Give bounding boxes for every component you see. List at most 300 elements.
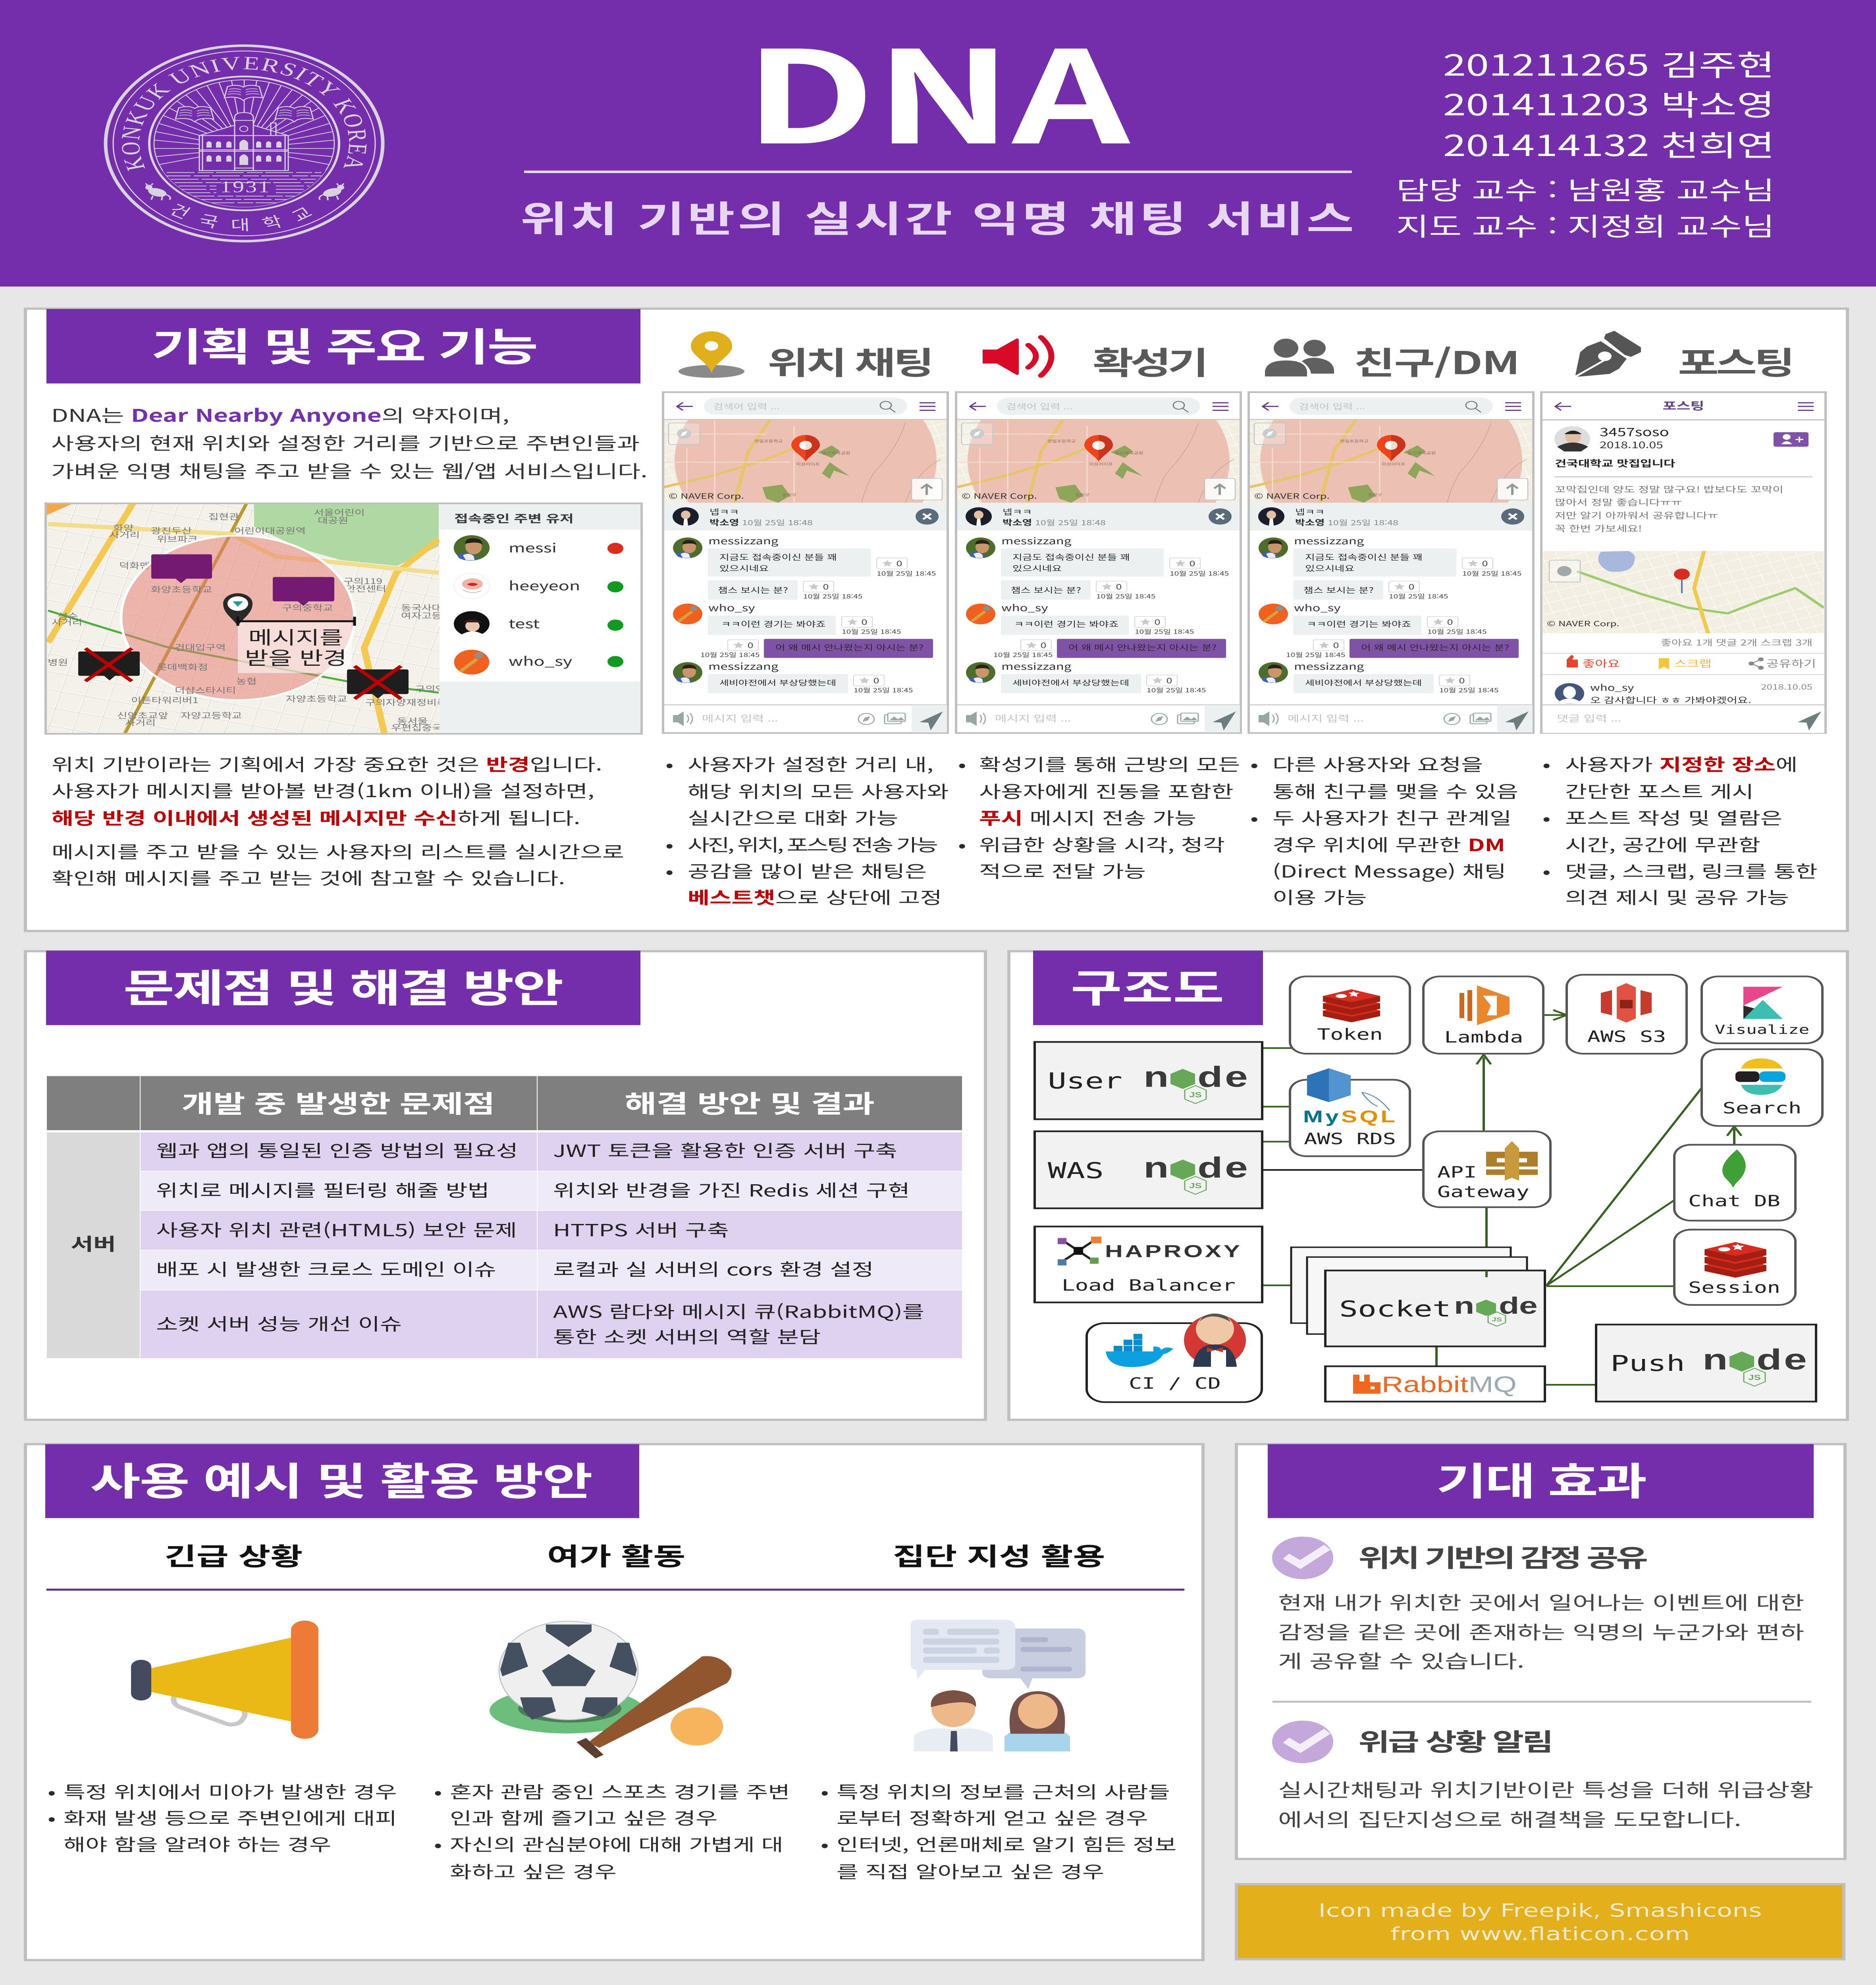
phone: posting screen: 스크랩 [1674, 656, 1712, 670]
text: location chat features [665, 752, 949, 909]
phone: friends and DM screen: 중랑구 [1368, 492, 1382, 497]
text: planning description: 위치 기반이라는 기획에서 가장 중요한 것은 반경입니다. [52, 752, 602, 776]
credit box: from www.flaticon.com [1390, 1924, 1690, 1945]
map: message radius: 광진두산 [151, 524, 192, 536]
credit box: Icon made by Freepik, Smashicons [1318, 1900, 1762, 1921]
team members: 201411203 박소영 [1443, 82, 1775, 124]
box: AWS S3: AWS S3 [1587, 1028, 1666, 1046]
phone: location chat screen: 지금도 접속중이신 분들 꽤 [719, 551, 837, 562]
text: posting features: 사용자가 지정한 장소에 [1565, 752, 1797, 776]
phone: friends and DM screen: 미성리이프 [1382, 462, 1406, 467]
box: API gateway: Gateway [1437, 1183, 1529, 1201]
phone: location chat screen: 동산체육공원 [822, 451, 850, 456]
phone: friends and DM screen: 동산체육공원 [1407, 451, 1436, 456]
phone: megaphone screen: 10월 25일 18:45 [1170, 569, 1229, 578]
heading: expected effects: 기대 효과 [1436, 1451, 1647, 1507]
phone: megaphone screen: 넵ㅋㅋ [1003, 506, 1032, 517]
map: message radius: 농협 [236, 675, 257, 686]
text: friends and DM features: 통해 친구를 맺을 수 있음 [1273, 778, 1518, 803]
text: location chat features: • [665, 832, 673, 856]
text: megaphone features: • [958, 832, 966, 856]
phone: posting screen: © NAVER Corp. [1547, 618, 1620, 628]
text: friends and DM features [1250, 752, 1518, 909]
heading: planning and features [46, 309, 640, 384]
feature heading: megaphone: 확성기 [1093, 338, 1209, 383]
phone: location chat screen: 넵ㅋㅋ [710, 506, 739, 517]
box: search: Search [1723, 1099, 1801, 1117]
table: problems and solutions [47, 1076, 962, 1358]
phone: location chat screen: 면일초등학교 [754, 439, 783, 444]
box: WAS server: e [1225, 1152, 1248, 1184]
text: location chat features: 베스트챗으로 상단에 고정 [688, 885, 942, 909]
map: message radius: 사거리 [109, 529, 140, 540]
table: problems and solutions: HTTPS 서버 구축 [553, 1217, 729, 1241]
box: chat DB: Chat DB [1688, 1193, 1780, 1210]
text: location chat features: 공감을 많이 받은 채팅은 [688, 858, 927, 883]
map: message radius: 사거리 [52, 616, 82, 627]
map: message radius: 롯데백화점 [157, 661, 208, 672]
map: message radius: 더샵스타시티 [175, 684, 236, 696]
box: WAS server: JS [1189, 1181, 1202, 1190]
phone: megaphone screen: who_sy [1001, 601, 1048, 614]
phone: friends and DM screen: 메시지 입력 ... [1288, 711, 1364, 725]
stacked socket servers: JS [1492, 1316, 1502, 1323]
panel: problems and solutions [25, 951, 985, 1420]
feature heading: location chat: 위치 채팅 [767, 338, 934, 383]
text: collective intelligence cases: 를 직접 알아보고 싶은 경우 [837, 1859, 1104, 1883]
text: collective intelligence cases: • [821, 1831, 829, 1856]
box: AWS RDS: MySQL [1303, 1108, 1395, 1126]
text: megaphone features: 확성기를 통해 근방의 모든 [979, 752, 1240, 776]
table: problems and solutions: AWS 람다와 메시지 큐(RabbitMQ)를 [553, 1299, 924, 1323]
text: leisure cases: • [434, 1779, 442, 1803]
radius bar and label: 메시지를 [248, 624, 343, 650]
text: collective intelligence cases: 인터넷, 언론매체로 알기 힘든 정보 [837, 1831, 1176, 1856]
table: problems and solutions: 위치로 메시지를 필터링 해줄 방법 [156, 1177, 490, 1201]
user row: heeyeon: heeyeon [509, 576, 580, 594]
phone: friends and DM screen: 10월 25일 18:45 [1427, 627, 1487, 636]
table: problems and solutions: 서버 [71, 1231, 116, 1255]
text: planning description [52, 752, 624, 889]
box: lambda: Lambda [1444, 1029, 1523, 1046]
text: collective intelligence cases: 로부터 정확하게 얻고 싶은 경우 [837, 1805, 1148, 1829]
table: problems and solutions: 위치와 반경을 가진 Redis 세션 구현 [553, 1177, 910, 1201]
phone: friends and DM screen: 0 [1482, 558, 1488, 569]
feature heading: posting [1575, 331, 1795, 383]
stacked socket servers: Socket [1339, 1296, 1451, 1322]
phone: posting screen: 2018.10.05 [1761, 682, 1812, 692]
phone: posting screen [1541, 392, 1826, 733]
box: user server: d [1197, 1061, 1223, 1093]
phone: location chat screen: 10월 25일 18:45 [842, 627, 901, 636]
intro text: 사용자의 현재 위치와 설정한 거리를 기반으로 주변인들과 [51, 429, 640, 455]
phone: megaphone screen: 10월 25일 18:45 [1096, 592, 1155, 601]
phone: location chat screen: 박소영 [710, 516, 739, 528]
phone: posting screen: 꼭 한번 가보세요! [1555, 522, 1642, 534]
phone: friends and DM screen: ㅋㅋ이런 경기는 봐야죠 [1307, 618, 1411, 629]
box: user server: User [1048, 1068, 1122, 1094]
effect: shared emotion [1272, 1536, 1804, 1673]
box: session: Session [1688, 1279, 1780, 1297]
box: API gateway: API [1437, 1164, 1477, 1181]
connector lines [1262, 1010, 1741, 1385]
box: visualize [1702, 976, 1822, 1043]
phone: location chat screen: 메시지 입력 ... [702, 711, 778, 725]
phone: megaphone screen: messizzang [1001, 659, 1072, 673]
icon: megaphone [131, 1621, 318, 1739]
phone: megaphone screen: 메시지 입력 ... [995, 711, 1071, 725]
radius bar and label: 받을 반경 [245, 644, 347, 670]
table: problems and solutions: 통한 소켓 서버의 역할 분담 [553, 1324, 821, 1348]
phone: friends and DM screen: 있으시네요 [1305, 563, 1354, 573]
heading: problems and solutions: 문제점 및 해결 방안 [123, 956, 563, 1014]
text: location chat features: 실시간으로 대화 가능 [688, 805, 898, 829]
map: message radius: 자양초등학교 [286, 692, 347, 704]
effect: emergency alert [1272, 1721, 1814, 1832]
phone: megaphone screen: 10월 25일 18:45 [993, 651, 1053, 659]
text: friends and DM features: • [1250, 805, 1258, 829]
phone: megaphone screen: 중랑구 [1075, 492, 1089, 497]
phone: friends and DM screen: messizzang [1294, 534, 1364, 547]
box: WAS server: d [1197, 1152, 1223, 1184]
box: push server: n [1702, 1343, 1728, 1376]
phone: location chat screen: 어 왜 메시 안나왔는지 아시는 분? [775, 642, 924, 653]
feature heading: friends and DM [1265, 338, 1520, 383]
map: message radius: 성수 [58, 610, 78, 621]
box: chat DB [1674, 1145, 1795, 1221]
stacked socket servers: e [1519, 1293, 1538, 1319]
marker: visible message [273, 577, 334, 606]
logo: university seal: 건국대학교 [165, 195, 330, 235]
text: location chat features: • [665, 858, 673, 883]
text: friends and DM features: 다른 사용자와 요청을 [1273, 752, 1483, 776]
box: session [1674, 1230, 1795, 1305]
phone: megaphone screen: 챔스 보시는 분? [1011, 584, 1081, 595]
map: message radius: 자양고등학교 [181, 709, 242, 721]
box: push server: d [1756, 1343, 1782, 1376]
user row: test: test [509, 614, 540, 632]
phone: friends and DM screen: © NAVER Corp. [1254, 490, 1330, 501]
feature heading: megaphone [983, 337, 1209, 383]
map: message radius: 우편집중국 [391, 721, 442, 733]
phone: megaphone screen: messizzang [1001, 534, 1072, 547]
map: message radius: 구의자양재정비촉 [365, 696, 447, 707]
text: location chat features: • [665, 752, 673, 776]
phone: friends and DM screen: 어 왜 메시 안나왔는지 아시는 분? [1361, 642, 1509, 653]
phone: megaphone screen: 0 [1166, 675, 1172, 686]
map: message radius: 구의119 [343, 575, 382, 586]
phone: location chat screen: 10월 25일 18:48 [742, 517, 813, 528]
text: planning description: 사용자가 메시지를 받아볼 반경(1km 이내)을 설정하면, [52, 778, 594, 802]
text: location chat features: 해당 위치의 모든 사용자와 [688, 778, 949, 803]
phone: megaphone screen: 세비야전에서 부상당했는데 [1012, 677, 1129, 688]
table: problems and solutions: 로컬과 실 서버의 cors 환경 설정 [553, 1256, 874, 1280]
icon: chat and people [911, 1620, 1085, 1752]
effect: emergency alert: 실시간채팅과 위치기반이란 특성을 더해 위급상황 [1278, 1776, 1814, 1802]
text: leisure cases: 화하고 싶은 경우 [450, 1859, 617, 1883]
phone: friends and DM screen: messizzang [1294, 659, 1364, 673]
logo: university seal: 1931 [220, 177, 271, 196]
phone: location chat screen: 0 [873, 675, 879, 686]
marker: blocked message [347, 666, 409, 699]
text: posting features: • [1542, 805, 1550, 829]
effect: emergency alert: 에서의 집단지성으로 해결책을 도모합니다. [1278, 1806, 1741, 1832]
phone: location chat screen: 검색어 입력 ... [713, 401, 780, 412]
phone: friends and DM screen: 10월 25일 18:48 [1328, 517, 1398, 528]
box: AWS S3 [1567, 975, 1687, 1054]
phone: megaphone screen: 10월 25일 18:45 [1147, 686, 1206, 694]
intro text: DNA는 Dear Nearby Anyone의 약자이며, [51, 401, 509, 427]
phone: posting screen: 2018.10.05 [1600, 438, 1663, 451]
phone: megaphone screen: 0 [1190, 558, 1195, 569]
phone: megaphone screen: 10월 25일 18:48 [1035, 517, 1106, 528]
box: WAS server [1035, 1131, 1262, 1208]
text: friends and DM features: 이용 가능 [1273, 885, 1367, 909]
phone: location chat screen: ㅋㅋ이런 경기는 봐야죠 [721, 618, 825, 629]
box: lambda [1423, 976, 1543, 1054]
effect: shared emotion: 게 공유할 수 있습니다. [1278, 1647, 1524, 1673]
map: message radius: 사거리 [125, 716, 156, 728]
phone: megaphone screen [956, 368, 1241, 733]
phone: friends and DM screen: 10월 25일 18:45 [1389, 592, 1448, 601]
phone: posting screen: 포스팅 [1663, 398, 1704, 413]
phone: megaphone screen: 박소영 [1003, 516, 1032, 528]
phone: location chat screen: 챔스 보시는 분? [718, 584, 788, 595]
phone: location chat screen: 있으시네요 [719, 563, 769, 573]
text: friends and DM features: • [1250, 752, 1258, 776]
stacked socket servers [1291, 1247, 1545, 1346]
phone: megaphone screen: 0 [1041, 640, 1046, 650]
phone: posting screen: 많아서 정말 좋습니다ㅠㅠ [1555, 496, 1682, 508]
stacked socket servers: d [1499, 1293, 1519, 1319]
text: posting features: 의견 제시 및 공유 가능 [1565, 885, 1789, 909]
text: leisure cases: 자신의 관심분야에 대해 가볍게 대 [450, 1831, 783, 1856]
text: friends and DM features: 경우 위치에 무관한 DM [1273, 832, 1505, 856]
phone: megaphone screen: © NAVER Corp. [962, 490, 1037, 501]
effect: emergency alert: 위급 상황 알림 [1358, 1723, 1554, 1758]
title rule and subtitle: 위치 기반의 실시간 익명 채팅 서비스 [520, 190, 1354, 243]
phone: posting screen: 저만 알기 아까워서 공유합니다ㅠ [1555, 509, 1718, 521]
box: user server: n [1143, 1061, 1169, 1093]
table: problems and solutions: 배포 시 발생한 크로스 도메인 이슈 [156, 1256, 496, 1280]
phone: megaphone screen: 미성리이프 [1089, 462, 1113, 467]
marker: blocked message [78, 648, 140, 681]
box: user server: JS [1189, 1091, 1202, 1099]
phone: location chat screen: © NAVER Corp. [669, 490, 744, 501]
phone: posting screen: 댓글 입력 ... [1557, 711, 1621, 725]
phone: megaphone screen: 있으시네요 [1012, 563, 1062, 573]
phone: location chat screen: 10월 25일 18:45 [700, 651, 760, 659]
title: DNA: DNA [744, 0, 1132, 180]
professors [1396, 171, 1775, 243]
text: megaphone features: • [958, 752, 966, 776]
stacked socket servers: n [1454, 1293, 1474, 1319]
phone: megaphone screen: 10월 25일 18:45 [1135, 627, 1194, 636]
box: RabbitMQ [1325, 1366, 1545, 1401]
phone: location chat screen: who_sy [708, 601, 755, 614]
phone: friends and DM screen: 박소영 [1295, 516, 1325, 528]
phone: megaphone screen: 검색어 입력 ... [1006, 401, 1073, 412]
box: AWS RDS [1290, 1068, 1410, 1156]
phone: friends and DM screen: 검색어 입력 ... [1299, 401, 1365, 412]
phone: friends and DM screen: 세비야전에서 부상당했는데 [1305, 677, 1422, 688]
phone: location chat screen: 10월 25일 18:45 [877, 569, 936, 578]
panel: architecture diagram [1009, 951, 1847, 1420]
map: message radius: 동국사대부 [401, 601, 452, 613]
intro text: 가벼운 익명 채팅을 주고 받을 수 있는 웹/앱 서비스입니다. [51, 457, 648, 483]
phone: friends and DM screen: 지금도 접속중이신 분들 꽤 [1305, 551, 1423, 562]
map: message radius: 화양초등학교 [151, 583, 212, 595]
effect: shared emotion: 현재 내가 위치한 곳에서 일어나는 이벤트에 대한 [1278, 1588, 1804, 1615]
phone: location chat screen: 미성리이프 [796, 462, 820, 467]
box: visualize: Visualize [1715, 1023, 1809, 1037]
panel: expected effects [1236, 1444, 1845, 1859]
table: problems and solutions: 해결 방안 및 결과 [625, 1084, 875, 1120]
box: token [1290, 976, 1410, 1054]
phone: megaphone screen: 0 [1155, 616, 1160, 627]
nearby user list [440, 503, 642, 734]
map: message radius: 여자고등학 [401, 609, 452, 621]
map: message radius: 구의역 [415, 683, 445, 694]
phone: friends and DM screen: 10월 25일 18:45 [1462, 569, 1521, 578]
panel: usage examples [25, 1444, 1203, 1960]
text: emergency cases: 화재 발생 등으로 주변인에게 대피 [64, 1805, 397, 1829]
box: push server: Push [1610, 1350, 1685, 1376]
phone: posting screen: 오 감사합니다 ㅎㅎ 가봐야겠어요. [1590, 694, 1751, 705]
text: collective intelligence cases [821, 1779, 1176, 1883]
phone: location chat screen: 10월 25일 18:45 [803, 592, 862, 601]
map: message radius: 건대입구역 [175, 641, 226, 653]
phone: friends and DM screen: 넵ㅋㅋ [1295, 506, 1325, 517]
panel: planning and main features [25, 308, 1847, 931]
user row: who_sy: who_sy [509, 651, 572, 670]
text: emergency cases [48, 1779, 397, 1856]
box: push server: JS [1748, 1374, 1761, 1382]
text: leisure cases: • [434, 1831, 442, 1856]
map: message radius: 구의중학교 [282, 601, 333, 613]
phone: megaphone screen: 지금도 접속중이신 분들 꽤 [1012, 551, 1130, 562]
phone: location chat screen: 0 [862, 616, 867, 627]
table: problems and solutions: 개발 중 발생한 문제점 [181, 1084, 495, 1120]
user row: messi: messi [509, 538, 557, 556]
phone: posting screen: who_sy [1590, 681, 1634, 693]
phone: posting screen: 건국대학교 맛집입니다 [1555, 456, 1675, 469]
column heading: leisure: 여가 활동 [547, 1537, 685, 1572]
column heading: collective intelligence: 집단 지성 활용 [893, 1537, 1105, 1572]
text: emergency cases: • [48, 1805, 56, 1829]
text: planning description: 해당 반경 이내에서 생성된 메시지만 수신하게 됩니다. [52, 805, 580, 829]
box: CI and CD [1087, 1313, 1262, 1402]
professors: 지도 교수 : 지정희 교수님 [1396, 207, 1775, 243]
box: user server: e [1225, 1061, 1248, 1093]
heading: expected effects [1268, 1444, 1814, 1518]
text: posting features: 시간, 공간에 무관함 [1565, 832, 1760, 856]
box: user server [1035, 1042, 1262, 1119]
text: location chat features: 사진, 위치, 포스팅 전송 가능 [688, 832, 938, 856]
text: planning description: 메시지를 주고 받을 수 있는 사용자의 리스트를 실시간으로 [52, 839, 624, 863]
phone: location chat screen: 10월 25일 18:45 [854, 686, 913, 694]
effect: shared emotion: 위치 기반의 감정 공유 [1358, 1538, 1648, 1574]
phone: friends and DM screen: 면일초등학교 [1340, 439, 1369, 444]
credit box [1236, 1884, 1844, 1959]
text: megaphone features: 적으로 전달 가능 [979, 858, 1146, 883]
user row: heeyeon [454, 573, 623, 599]
table: problems and solutions: 사용자 위치 관련(HTML5) 보안 문제 [156, 1217, 517, 1241]
box: load balancer: Load Balancer [1062, 1276, 1236, 1295]
text: posting features: 간단한 포스트 게시 [1565, 778, 1754, 803]
heading: problems and solutions [46, 951, 640, 1025]
text: posting features: • [1542, 752, 1550, 776]
phone: location chat screen: 세비야전에서 부상당했는데 [719, 677, 836, 688]
box: load balancer [1035, 1226, 1262, 1303]
text: posting features: 포스트 작성 및 열람은 [1565, 805, 1782, 829]
user row: test [454, 611, 623, 636]
phone: location chat screen: 중랑구 [782, 492, 796, 497]
box: API gateway [1423, 1131, 1550, 1207]
phone: posting screen: 좋아요 [1583, 656, 1620, 670]
map: message radius: 신양초교앞 [117, 709, 168, 721]
header banner [0, 0, 1876, 287]
phone: friends and DM screen: who_sy [1294, 601, 1341, 614]
phone: location chat screen: 0 [823, 581, 829, 592]
text: posting features: • [1542, 858, 1550, 883]
box: CI and CD: CI / CD [1129, 1375, 1221, 1393]
box: WAS server: WAS [1048, 1158, 1104, 1183]
text: megaphone features [958, 752, 1240, 883]
phone: friends and DM screen: 10월 25일 18:45 [1439, 686, 1498, 694]
box: AWS RDS: AWS RDS [1304, 1130, 1396, 1148]
map: message radius: 위브파크 [157, 533, 198, 544]
text: leisure cases: 인과 함께 즐기고 싶은 경우 [450, 1805, 717, 1829]
icon: soccer ball and bat [490, 1621, 731, 1758]
feature heading: friends and DM: 친구/DM [1354, 338, 1520, 383]
table: problems and solutions: JWT 토큰을 활용한 인증 서버 구축 [553, 1137, 897, 1162]
map: message radius: 집현관 [208, 511, 239, 522]
table: problems and solutions: 웹과 앱의 통일된 인증 방법의 필요성 [156, 1137, 518, 1162]
phone: friends and DM screen: 0 [1409, 581, 1414, 592]
phone: location chat screen [663, 368, 948, 733]
map: message radius: 이튼타워리버1 [131, 694, 199, 705]
map: message radius: 서울어린이 [314, 506, 365, 518]
phone: megaphone screen: ㅋㅋ이런 경기는 봐야죠 [1014, 618, 1118, 629]
heading: planning and features: 기획 및 주요 기능 [151, 315, 538, 372]
map: message radius: 어린이대공원역 [234, 524, 306, 536]
team members: 201414132 천희연 [1443, 122, 1775, 164]
text: posting features [1542, 752, 1818, 909]
marker: visible message [151, 554, 212, 583]
phone: megaphone screen: 면일초등학교 [1047, 439, 1076, 444]
box: push server [1596, 1324, 1816, 1401]
phone: friends and DM screen: 0 [1333, 640, 1339, 650]
box: token: Token [1317, 1026, 1383, 1044]
phone: posting screen: 좋아요 1개 댓글 2개 스크랩 3개 [1661, 636, 1812, 648]
phone: location chat screen: 0 [897, 558, 902, 569]
phone: megaphone screen: 동산체육공원 [1115, 451, 1143, 456]
text: emergency cases: 특정 위치에서 미아가 발생한 경우 [64, 1779, 397, 1803]
map: message radius: 동서울 [397, 715, 428, 726]
heading: usage examples [45, 1444, 639, 1518]
box: search [1702, 1049, 1822, 1126]
phone: posting screen: 3457soso [1600, 423, 1669, 439]
text: leisure cases [434, 1779, 790, 1883]
phone: friends and DM screen [1249, 368, 1533, 733]
text: friends and DM features: 두 사용자가 친구 관계일 [1273, 805, 1512, 829]
box: WAS server: n [1143, 1152, 1169, 1184]
text: friends and DM features: (Direct Message) 채팅 [1273, 858, 1506, 883]
map: message radius: 덕화맨션 [119, 559, 160, 571]
map: message radius: 병원 [48, 656, 68, 667]
effect: shared emotion: 감정을 같은 곳에 존재하는 익명의 누군가와 편하 [1278, 1618, 1804, 1645]
